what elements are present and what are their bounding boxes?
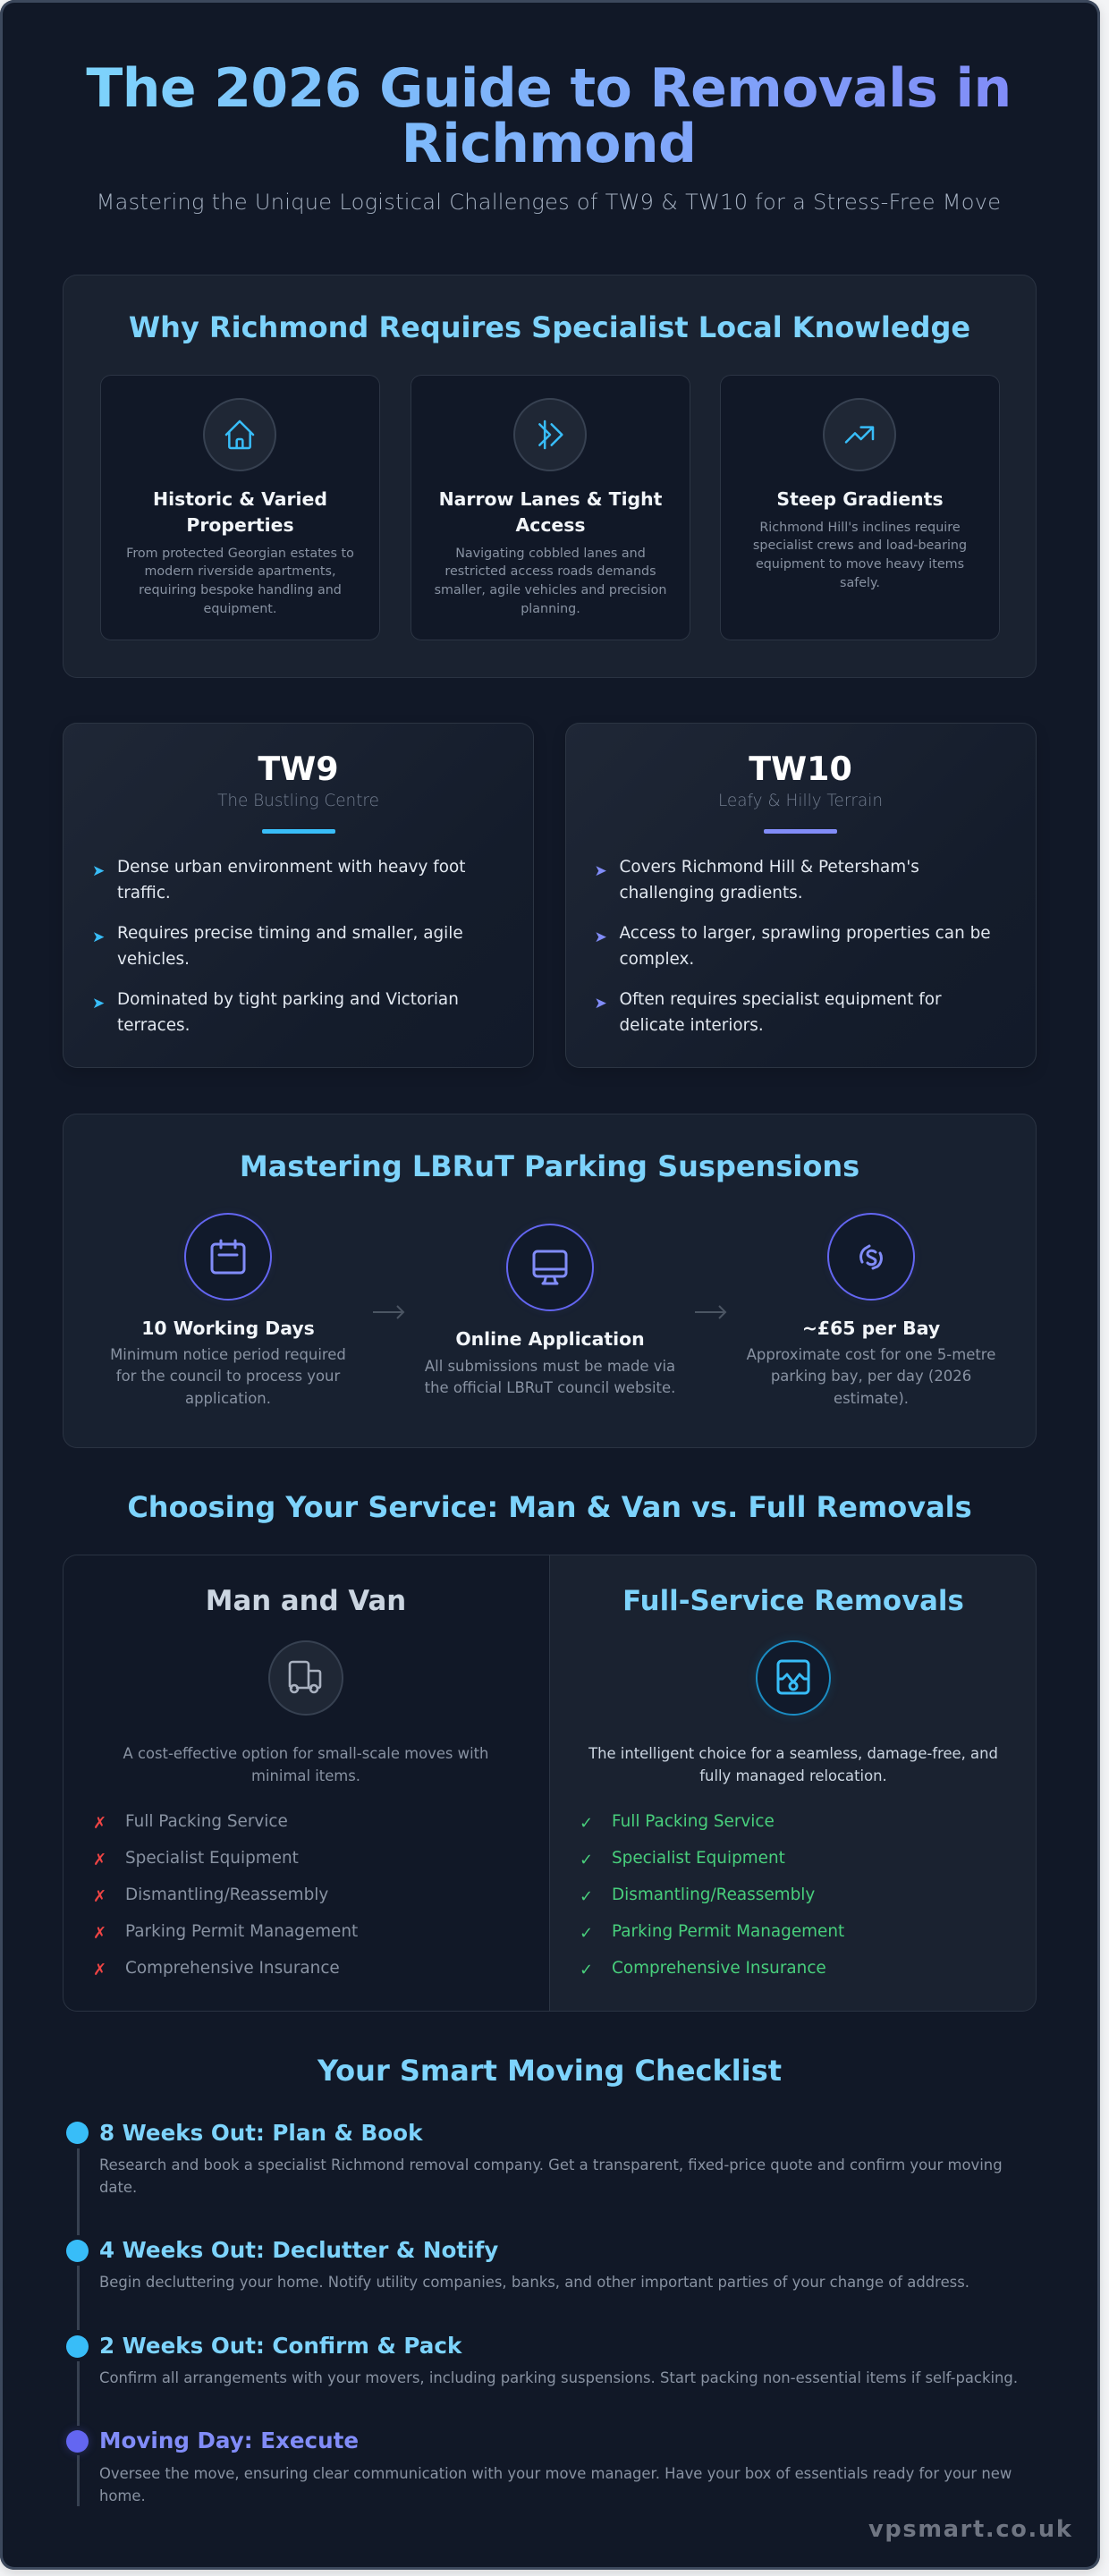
timeline: checklist	[63, 2120, 1018, 2506]
card description: Richmond Hill's inclines require	[759, 521, 961, 535]
cross marks: ✗	[93, 1923, 106, 1943]
feature list: Dismantling/Reassembly	[125, 1885, 328, 1904]
step description: online: All submissions must be made via	[425, 1358, 675, 1375]
arrow	[373, 1305, 404, 1319]
card description	[753, 521, 967, 590]
panel: parking suspensions	[63, 1114, 1037, 1448]
column title: Full-Service Removals	[622, 1585, 964, 1617]
column description: minimal items.	[251, 1767, 360, 1784]
check marks: ✓	[580, 1814, 593, 1832]
card: historic properties	[100, 375, 380, 640]
timeline line	[77, 2148, 80, 2235]
icon: calendar	[184, 1213, 272, 1301]
TW10 bullet arrows: ➤	[594, 928, 607, 946]
check marks: ✓	[580, 1961, 593, 1979]
step title: working days: 10 Working Days	[141, 1318, 315, 1339]
TW10 point 3: delicate interiors.	[619, 1016, 764, 1035]
card title	[439, 488, 662, 535]
TW9 point 3: terraces.	[117, 1016, 190, 1035]
step title: online: Online Application	[455, 1328, 645, 1350]
panel: TW10	[565, 723, 1037, 1068]
step text: moving day	[99, 2465, 1012, 2504]
card title: Steep Gradients	[776, 488, 944, 510]
step description: cost: estimate).	[834, 1390, 909, 1407]
step description: cost: parking bay, per day (2026	[771, 1368, 971, 1385]
TW10 point 3: Often requires specialist equipment for	[619, 990, 942, 1009]
TW10 heading: TW10	[749, 750, 852, 788]
icon: chevrons	[513, 397, 587, 470]
icon: house	[203, 397, 276, 470]
feature list	[125, 1812, 358, 1978]
step dot: 8 weeks	[66, 2122, 89, 2144]
title	[86, 61, 1012, 172]
TW9 heading: TW9	[258, 750, 339, 788]
feature list: Specialist Equipment	[125, 1849, 299, 1868]
heading: choosing service: Choosing Your Service: Man & Van vs. Full Removals	[127, 1490, 972, 1524]
step heading: 2 weeks: 2 Weeks Out: Confirm & Pack	[99, 2333, 461, 2359]
heading: why Richmond: Why Richmond Requires Specialist Local Knowledge	[129, 310, 970, 344]
TW9 bullet arrows	[92, 862, 105, 1013]
step dot: 4 weeks	[66, 2240, 89, 2262]
feature list: Comprehensive Insurance	[612, 1959, 826, 1978]
icon: monitor	[506, 1224, 594, 1311]
step text: 4 weeks: Begin decluttering your home. Notify utility companies, banks, and other important parties of your change of address.	[99, 2274, 969, 2291]
card description: planning.	[521, 602, 580, 616]
icon: packed box	[756, 1640, 831, 1716]
card description: equipment to move heavy items	[756, 557, 964, 572]
feature list: Parking Permit Management	[612, 1922, 844, 1941]
TW9 bullet arrows: ➤	[92, 995, 105, 1013]
TW9 bullet arrows: ➤	[92, 862, 105, 880]
heading: checklist: Your Smart Moving Checklist	[317, 2054, 782, 2088]
icon: trending up	[823, 397, 896, 470]
TW9 point 3	[117, 990, 459, 1035]
TW9 point 3: Dominated by tight parking and Victorian	[117, 990, 459, 1009]
card description: requiring bespoke handling and	[139, 583, 342, 597]
step description: working days: application.	[185, 1390, 271, 1407]
step dot: 2 weeks	[66, 2335, 89, 2358]
column description	[588, 1745, 998, 1784]
card: steep gradients	[720, 375, 1000, 640]
TW10 point 2	[619, 924, 991, 969]
TW10 point 1	[619, 858, 919, 902]
step title: cost: ~£65 per Bay	[802, 1318, 940, 1339]
title: The 2026 Guide to Removals in	[86, 57, 1012, 120]
card description: Navigating cobbled lanes and	[455, 547, 646, 561]
column description	[123, 1745, 488, 1784]
card title: Properties	[186, 513, 294, 535]
step text: moving day: Oversee the move, ensuring clear communication with your move manager. Have your box of essentials ready for your new	[99, 2465, 1012, 2482]
step text: 2 weeks: Confirm all arrangements with your movers, including parking suspensions. Start packing non-essential items if self-packing.	[99, 2369, 1018, 2386]
TW9 point 2	[117, 924, 463, 969]
check marks: ✓	[580, 1887, 593, 1905]
TW10 point 2: Access to larger, sprawling properties can be	[619, 924, 991, 943]
step dot: moving day	[66, 2430, 89, 2453]
TW10 bullet arrows	[594, 862, 607, 1013]
TW9 point 1	[117, 858, 465, 902]
TW10 point 1: Covers Richmond Hill & Petersham's	[619, 858, 919, 877]
step description: working days: Minimum notice period required	[110, 1346, 346, 1363]
card description: smaller, agile vehicles and precision	[435, 583, 666, 597]
column description: The intelligent choice for a seamless, damage-free, and	[588, 1745, 998, 1762]
card title: Narrow Lanes & Tight	[439, 488, 662, 510]
footer brand: vpsmart.co.uk	[868, 2516, 1073, 2543]
feature list: Dismantling/Reassembly	[612, 1885, 815, 1904]
card description: From protected Georgian estates to	[126, 547, 354, 561]
step description: cost	[746, 1346, 995, 1407]
card description	[126, 547, 354, 616]
step text: moving day: home.	[99, 2487, 146, 2504]
panel: TW9	[63, 723, 534, 1068]
card description: restricted access roads demands	[444, 564, 656, 579]
TW9 point 1: traffic.	[117, 884, 171, 902]
TW9 accent bar	[261, 829, 334, 834]
column title: Man and Van	[206, 1585, 406, 1617]
TW9 bullet arrows: ➤	[92, 928, 105, 946]
step description: online: the official LBRuT council website.	[425, 1379, 675, 1396]
TW10 point 3	[619, 990, 942, 1035]
card description: equipment.	[204, 602, 276, 616]
TW9 point 1: Dense urban environment with heavy foot	[117, 858, 465, 877]
feature list	[612, 1812, 844, 1978]
card: narrow lanes	[411, 375, 690, 640]
feature list: Parking Permit Management	[125, 1922, 358, 1941]
step description: online	[425, 1358, 675, 1396]
card description	[435, 547, 666, 616]
timeline line	[77, 2455, 80, 2506]
column description: fully managed relocation.	[699, 1767, 887, 1784]
TW9 subheading: The Bustling Centre	[217, 792, 379, 810]
step heading: moving day: Moving Day: Execute	[99, 2428, 359, 2453]
card title: Historic & Varied	[153, 488, 327, 510]
card description: modern riverside apartments,	[144, 564, 336, 579]
TW10 bullet arrows: ➤	[594, 995, 607, 1013]
step text: 8 weeks: Research and book a specialist Richmond removal company. Get a transparent, fixed-price quote and confirm your moving	[99, 2157, 1003, 2174]
timeline line	[77, 2266, 80, 2330]
card description: safely.	[840, 576, 880, 590]
TW10 accent bar	[764, 829, 837, 834]
step description: working days	[110, 1346, 346, 1407]
title: Richmond	[402, 113, 696, 175]
cross marks: ✗	[93, 1887, 106, 1905]
subtitle: Mastering the Unique Logistical Challenges of TW9 & TW10 for a Stress-Free Move	[97, 190, 1001, 215]
cross marks: ✗	[93, 1961, 106, 1979]
card title	[153, 488, 327, 535]
feature list: Full Packing Service	[612, 1812, 775, 1831]
feature list: Full Packing Service	[125, 1812, 288, 1831]
feature list: Specialist Equipment	[612, 1849, 785, 1868]
TW10 bullet arrows: ➤	[594, 862, 607, 880]
check marks	[580, 1814, 593, 1979]
heading: parking: Mastering LBRuT Parking Suspensions	[240, 1149, 859, 1183]
timeline line	[77, 2361, 80, 2426]
feature list: Comprehensive Insurance	[125, 1959, 340, 1978]
TW10 subheading: Leafy & Hilly Terrain	[718, 792, 883, 810]
step heading: 8 weeks: 8 Weeks Out: Plan & Book	[99, 2120, 422, 2145]
icon: currency cycle	[827, 1213, 915, 1301]
arrow	[695, 1305, 726, 1319]
cross marks	[93, 1814, 106, 1979]
TW10 point 1: challenging gradients.	[619, 884, 803, 902]
card description: specialist crews and load-bearing	[753, 538, 967, 553]
column: full-service removals	[580, 1585, 998, 1979]
step heading: 4 weeks: 4 Weeks Out: Declutter & Notify	[99, 2237, 498, 2263]
TW9 point 2: Requires precise timing and smaller, agile	[117, 924, 463, 943]
check marks: ✓	[580, 1850, 593, 1869]
step text: 8 weeks: date.	[99, 2179, 137, 2195]
card title: Access	[515, 513, 586, 535]
cross marks: ✗	[93, 1850, 106, 1869]
column: man and van	[93, 1585, 488, 1979]
check marks: ✓	[580, 1923, 593, 1943]
TW10 point 2: complex.	[619, 950, 694, 969]
panel: why Richmond	[63, 275, 1037, 678]
cross marks: ✗	[93, 1814, 106, 1832]
step text: 8 weeks	[99, 2157, 1003, 2195]
icon: truck	[268, 1640, 343, 1716]
column description: A cost-effective option for small-scale moves with	[123, 1745, 488, 1762]
panel: comparison	[63, 1555, 1037, 2012]
TW9 point 2: vehicles.	[117, 950, 190, 969]
step description: cost: Approximate cost for one 5-metre	[747, 1346, 995, 1363]
step description: working days: for the council to process your	[116, 1368, 340, 1385]
